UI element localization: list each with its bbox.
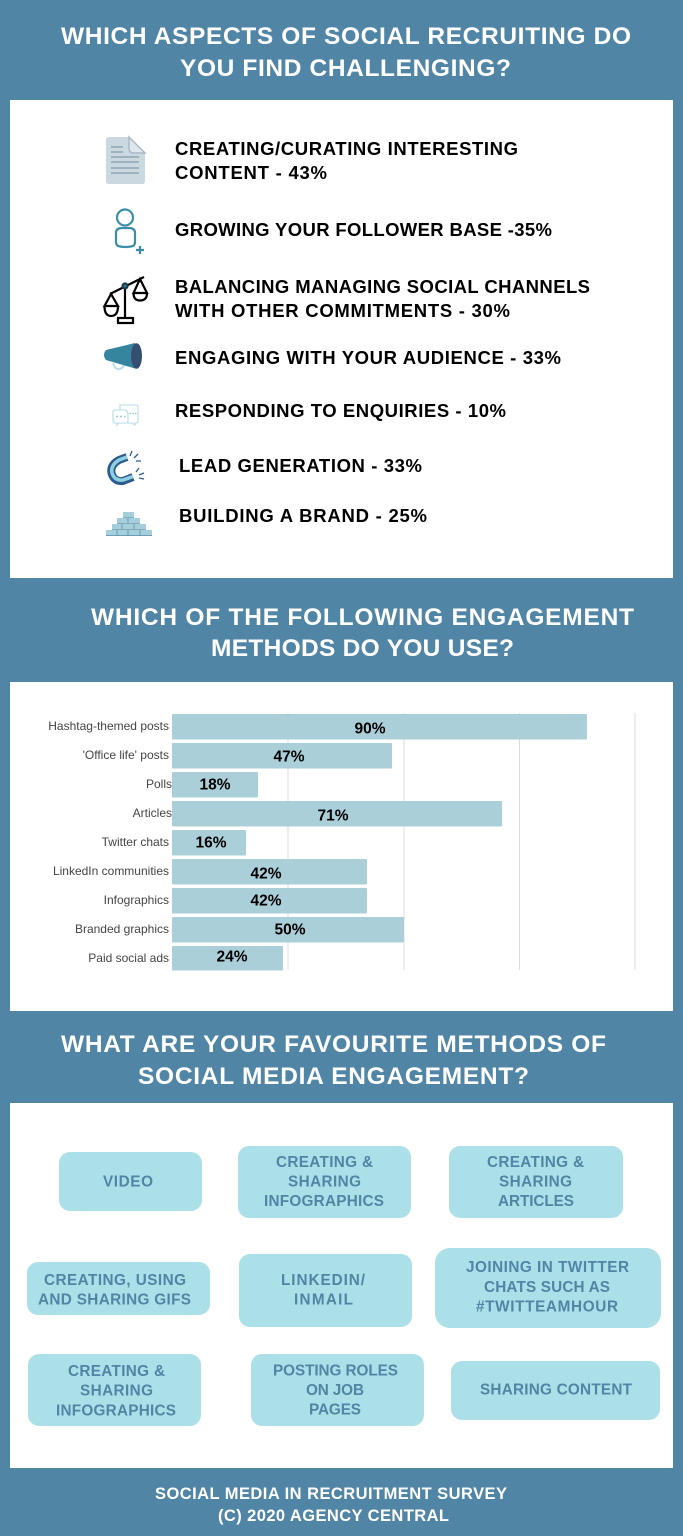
icon: magnet bbox=[111, 451, 144, 481]
text: lead generation: LEAD GENERATION - 33% bbox=[179, 455, 422, 476]
text: follower base: GROWING YOUR FOLLOWER BASE -35% bbox=[175, 219, 552, 240]
panel: favourite methods bbox=[10, 1103, 673, 1468]
category labels bbox=[48, 719, 172, 965]
text: engaging: ENGAGING WITH YOUR AUDIENCE - 33% bbox=[175, 347, 561, 368]
chip: job pages: PAGES bbox=[309, 1402, 361, 1418]
chip: linkedin bbox=[239, 1254, 412, 1327]
text: creating content: CONTENT - 43% bbox=[175, 162, 327, 183]
chip: gifs: AND SHARING GIFS bbox=[38, 1292, 191, 1308]
text: enquiries: RESPONDING TO ENQUIRIES - 10% bbox=[175, 400, 506, 421]
category labels: 'Office life' posts bbox=[83, 748, 169, 762]
category labels: Articles bbox=[133, 806, 172, 820]
text: creating content bbox=[175, 138, 518, 183]
category labels: Polls bbox=[146, 777, 172, 791]
chip: infographics 2: SHARING bbox=[80, 1382, 153, 1400]
value labels: 90% bbox=[354, 720, 386, 738]
chip: twitter: #TWITTEAMHOUR bbox=[476, 1298, 618, 1316]
chip: job pages: POSTING ROLES bbox=[273, 1362, 398, 1380]
text: brand: BUILDING A BRAND - 25% bbox=[179, 505, 427, 526]
chip: articles bbox=[449, 1146, 623, 1218]
chip: infographics: CREATING & bbox=[276, 1154, 373, 1171]
chip: articles: ARTICLES bbox=[498, 1193, 574, 1210]
chip: linkedin: LINKEDIN/ bbox=[281, 1272, 366, 1289]
value labels: 42% bbox=[250, 892, 282, 910]
icon: chat bubbles bbox=[113, 405, 138, 425]
heading: engagement methods: METHODS DO YOU USE? bbox=[211, 635, 514, 662]
chip: infographics 2 bbox=[28, 1354, 201, 1426]
bar chart bbox=[48, 713, 635, 970]
chip: sharing content bbox=[451, 1361, 660, 1420]
value labels: 42% bbox=[250, 866, 282, 882]
text: balancing bbox=[175, 276, 590, 321]
chip: job pages: ON JOB bbox=[306, 1382, 364, 1399]
heading: favourite methods bbox=[61, 1031, 606, 1090]
panel: engagement chart bbox=[10, 682, 673, 1011]
value labels: 47% bbox=[273, 748, 305, 766]
chip: infographics 2: CREATING & bbox=[68, 1363, 165, 1380]
category labels: Twitter chats bbox=[102, 835, 169, 849]
heading: favourite methods: WHAT ARE YOUR FAVOURITE METHODS OF bbox=[61, 1031, 606, 1058]
chip: articles: SHARING bbox=[499, 1174, 572, 1190]
text: creating content: CREATING/CURATING INTERESTING bbox=[175, 138, 518, 159]
category labels: Hashtag-themed posts bbox=[48, 719, 169, 733]
chip: video: VIDEO bbox=[103, 1174, 153, 1190]
chip: video bbox=[59, 1152, 202, 1211]
chip: twitter bbox=[435, 1248, 661, 1328]
footer: SOCIAL MEDIA IN RECRUITMENT SURVEY bbox=[155, 1485, 507, 1503]
chip: infographics bbox=[238, 1146, 411, 1218]
value labels: 24% bbox=[216, 948, 248, 966]
heading: engagement methods: WHICH OF THE FOLLOWING ENGAGEMENT bbox=[91, 604, 634, 631]
category labels: LinkedIn communities bbox=[53, 864, 169, 878]
value labels: 71% bbox=[317, 808, 349, 824]
chip: sharing content: SHARING CONTENT bbox=[480, 1382, 633, 1398]
chip: twitter: JOINING IN TWITTER bbox=[466, 1259, 629, 1276]
chip: infographics 2: INFOGRAPHICS bbox=[56, 1402, 176, 1420]
icon: add user bbox=[116, 210, 144, 254]
heading: challenges bbox=[61, 23, 631, 82]
chip: gifs: CREATING, USING bbox=[44, 1272, 186, 1289]
value labels: 50% bbox=[274, 922, 306, 938]
icon: document bbox=[106, 137, 145, 184]
text: balancing: WITH OTHER COMMITMENTS - 30% bbox=[175, 300, 510, 321]
chip: infographics: INFOGRAPHICS bbox=[264, 1193, 384, 1210]
chip: linkedin: INMAIL bbox=[294, 1292, 353, 1308]
value labels bbox=[195, 720, 386, 966]
value labels: 16% bbox=[195, 834, 227, 852]
chip: gifs bbox=[27, 1262, 210, 1315]
category labels: Infographics bbox=[104, 893, 169, 907]
heading: challenges: WHICH ASPECTS OF SOCIAL RECRUITING DO bbox=[61, 23, 631, 50]
heading: favourite methods: SOCIAL MEDIA ENGAGEMENT? bbox=[138, 1063, 529, 1090]
chip: job pages bbox=[251, 1354, 424, 1426]
chip: articles: CREATING & bbox=[487, 1154, 584, 1171]
footer: (C) 2020 AGENCY CENTRAL bbox=[218, 1507, 449, 1525]
heading: engagement methods bbox=[91, 604, 634, 662]
heading: challenges: YOU FIND CHALLENGING? bbox=[180, 55, 511, 82]
chip: infographics: SHARING bbox=[288, 1174, 361, 1190]
text: balancing: BALANCING MANAGING SOCIAL CHANNELS bbox=[175, 276, 590, 297]
category labels: Paid social ads bbox=[88, 951, 169, 965]
category labels: Branded graphics bbox=[75, 922, 169, 936]
icon: brick wall bbox=[106, 512, 152, 536]
chip: twitter: CHATS SUCH AS bbox=[484, 1279, 610, 1296]
icon: megaphone bbox=[104, 343, 142, 369]
icon: scales bbox=[104, 277, 147, 323]
footer bbox=[155, 1485, 507, 1525]
value labels: 18% bbox=[199, 776, 231, 794]
panel: challenges list bbox=[10, 100, 673, 578]
